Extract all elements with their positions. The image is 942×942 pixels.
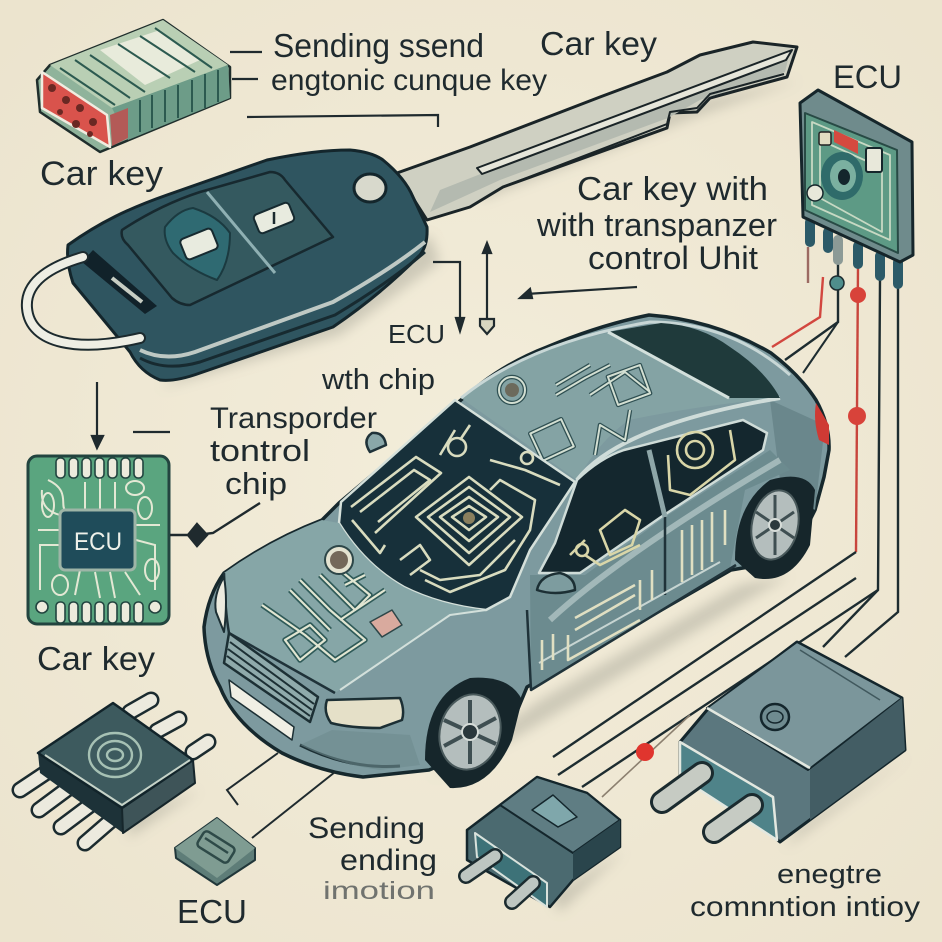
icon: large connector plug: [662, 642, 905, 842]
front headlight: [326, 698, 403, 728]
car body: [204, 315, 829, 777]
label: transponder control chip: tontrol: [210, 433, 310, 468]
label: sending ending imotion: ending: [340, 844, 437, 877]
label: car key bottom left: Car key: [37, 640, 156, 677]
windshield with circuit: [339, 400, 575, 610]
icon: small tile chip: [175, 818, 255, 885]
label: car key with transponder control unit: [536, 170, 777, 276]
pointer lines bottom: [227, 753, 335, 838]
arrows: centre: [433, 243, 637, 334]
tail light: [815, 403, 829, 445]
pointer line: chip to label: [133, 431, 170, 433]
rear quarter shade: [770, 400, 825, 510]
key fob: [68, 150, 427, 380]
label: sending ending imotion: imotion: [323, 877, 435, 905]
bumper: [300, 745, 400, 767]
rear window: [608, 323, 780, 398]
roof: [461, 333, 780, 480]
label: engine communication: comnntion intioy: [690, 891, 920, 922]
key ring: [27, 257, 140, 345]
label: engine communication: enegtre: [777, 859, 882, 889]
car: [204, 315, 829, 788]
rear wheel: [735, 477, 815, 579]
arrow: fob to circuit chip: [92, 382, 103, 448]
door circuit: [542, 510, 725, 670]
label: car key top: Car key: [540, 25, 658, 62]
label: ECU centre: ECU: [388, 319, 445, 349]
soft shadows: [128, 80, 910, 912]
label: transponder control chip: chip: [225, 466, 287, 501]
heading: sending label: [271, 27, 547, 97]
hood circuits: [262, 570, 385, 660]
wiring: ECU to car and connectors: [553, 247, 898, 797]
label: car key left: Car key: [40, 155, 163, 193]
side mirror far: [366, 433, 386, 452]
label: transponder control chip: [210, 402, 377, 501]
heading: sending label: Sending ssend: [273, 27, 484, 64]
side mirror: [537, 573, 575, 593]
label: car key with transponder control unit: control Uhit: [588, 240, 758, 276]
heading: sending label: engtonic cunque key: [271, 64, 547, 97]
red junction dots: [636, 276, 866, 761]
icon: green circuit chip with ECU label: ECU: [74, 528, 122, 556]
icon: green circuit chip with ECU label: [28, 456, 169, 624]
connector: chip to chip label: [170, 503, 260, 546]
label: car key with transponder control unit: Car key with: [577, 170, 768, 207]
icon: small connector plug: [466, 777, 620, 907]
label: transponder control chip: Transporder: [210, 402, 377, 435]
label: ECU top right: ECU: [833, 59, 902, 95]
roof circuits: [499, 365, 650, 461]
label: car key with transponder control unit: with transpanzer: [536, 207, 777, 243]
hood: [224, 520, 486, 693]
pointer lines top: [230, 52, 438, 127]
side windows: [539, 420, 767, 573]
key blade: [397, 42, 797, 220]
label: ECU bottom: ECU: [177, 893, 247, 930]
label: engine communication: [690, 859, 920, 922]
icon: bottom left chip with pins: [20, 700, 208, 843]
left headlight: [215, 577, 226, 632]
number plate: [229, 680, 294, 740]
label: with chip: wth chip: [321, 364, 435, 396]
icon: ECU module top right: [800, 90, 913, 284]
label: sending ending imotion: Sending: [308, 812, 425, 845]
front wheel: [425, 678, 522, 788]
door panels: [530, 450, 790, 690]
icon: circuit block top left: [37, 20, 230, 152]
grille: [224, 633, 318, 722]
label: sending ending imotion: [308, 812, 437, 905]
